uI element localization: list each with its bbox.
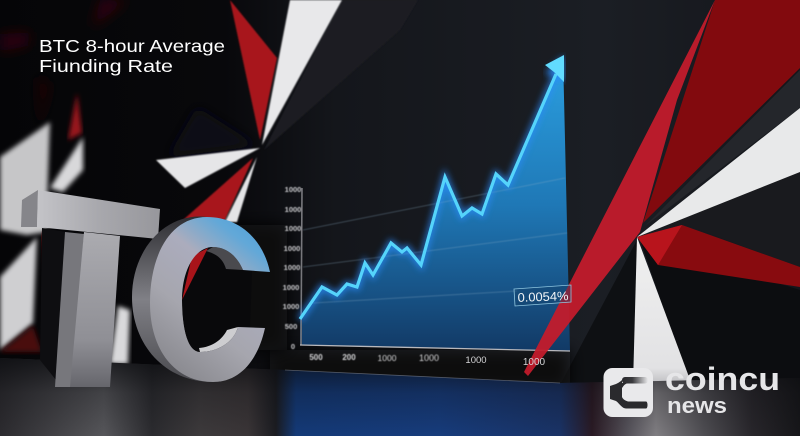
shards: left blurred white and red: [0, 93, 130, 364]
C front face: [150, 217, 270, 382]
title: Fiunding Rate: [39, 56, 173, 76]
chart: x axis labels: 1000: [378, 353, 397, 363]
chart: gridlines: [303, 178, 567, 303]
shards: right red and white pinwheel: [524, 0, 800, 385]
chart: y axis labels: 1000: [283, 302, 299, 311]
shards: centre pinwheel: [156, 0, 342, 222]
chart: x axis labels: 1000: [523, 357, 546, 368]
chart: y axis labels: 1000: [285, 224, 301, 233]
logo wordmark: coincu: [665, 361, 780, 397]
chart: y axis labels: [283, 185, 301, 351]
C inner bevels: [206, 247, 243, 270]
title: [39, 36, 225, 76]
chart: x axis labels: 1000: [419, 353, 439, 363]
chart: x axis labels: 500: [309, 353, 323, 362]
C opening: [182, 247, 252, 352]
chart: y axis labels: 1000: [284, 244, 300, 253]
chart: y axis labels: 500: [285, 322, 297, 331]
C depth side: [132, 217, 213, 382]
title: BTC 8-hour Average: [39, 36, 225, 56]
chart: axes: [300, 188, 570, 351]
red seen through C: [182, 248, 208, 300]
coincu news logo: [604, 361, 780, 418]
chart: x axis labels: 1000: [465, 355, 487, 366]
3D letter T: [21, 190, 160, 387]
chart: value callout: [514, 285, 571, 306]
floor: [0, 358, 800, 436]
wall facets: [168, 0, 800, 390]
3D letter C: [132, 217, 270, 382]
chart: y axis labels: 1000: [283, 283, 299, 292]
chart: line and arrow: [300, 55, 564, 319]
chart: y axis labels: 1000: [284, 263, 300, 272]
chart: x axis labels: [309, 353, 546, 368]
chart: blue area: [300, 55, 570, 351]
logo icon: [604, 368, 653, 417]
chart: x axis labels: 200: [342, 353, 356, 362]
chart: y axis labels: 1000: [285, 205, 301, 214]
coincu news logo: news: [667, 393, 727, 418]
chart: y axis labels: 1000: [285, 185, 301, 194]
shards: top-left dim red: [0, 0, 128, 130]
chart: y axis labels: 0: [291, 342, 295, 351]
chart: value callout: 0.0054%: [517, 289, 569, 305]
